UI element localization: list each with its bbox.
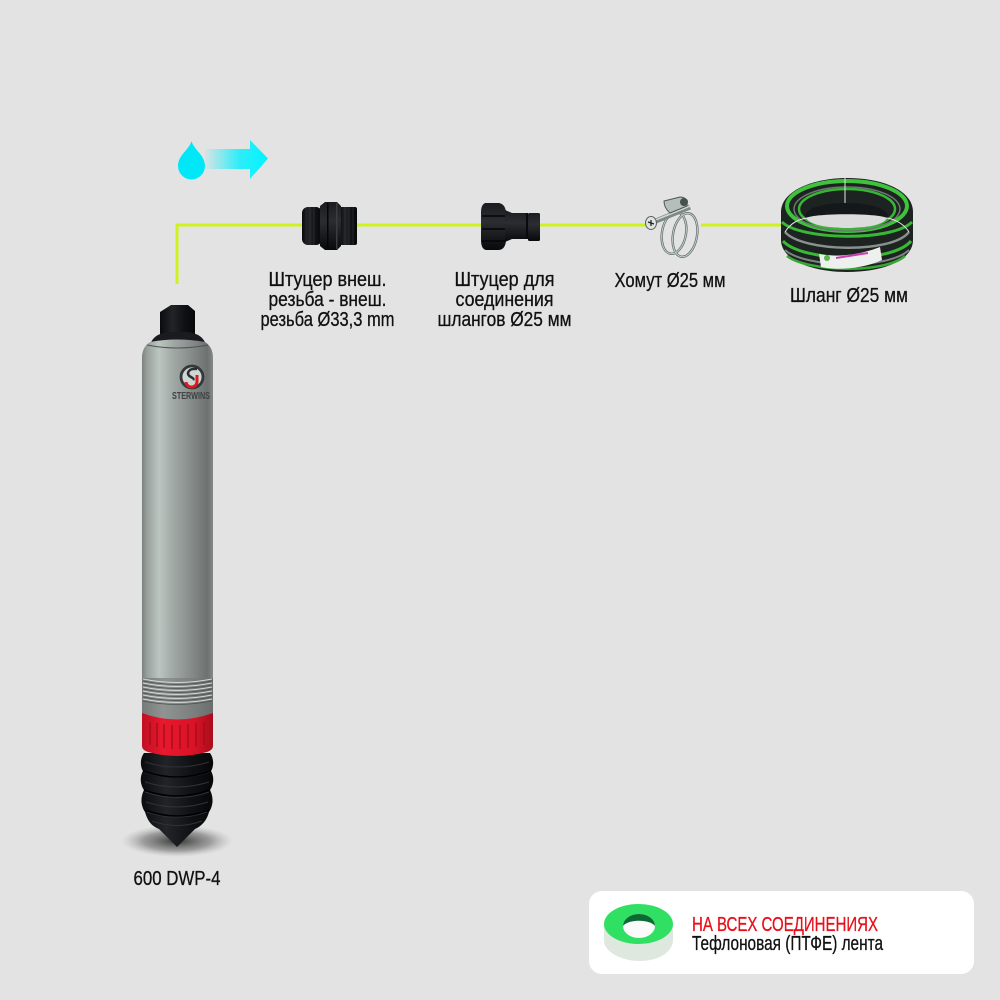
label: clamp: Хомут Ø25 мм bbox=[614, 270, 726, 292]
icon: teflon tape roll bbox=[604, 904, 673, 961]
pump bbox=[141, 305, 213, 847]
label: fitting 2: Штуцер для bbox=[454, 269, 554, 291]
icon: hose coil bbox=[781, 178, 913, 272]
icon: water drop with flow arrow bbox=[178, 140, 268, 180]
pump steel body bbox=[142, 340, 213, 679]
pump logo: STERWINS bbox=[172, 391, 210, 402]
label: fitting 2: соединения bbox=[456, 289, 554, 311]
fitting: male-male thread adapter bbox=[302, 202, 357, 250]
pump shadow bbox=[121, 825, 233, 857]
fitting: hose barb connector bbox=[481, 203, 540, 250]
pump red ring bbox=[142, 713, 213, 756]
icon: hose clamp bbox=[646, 197, 701, 259]
label: fitting 1: резьба - внеш. bbox=[268, 289, 386, 311]
pump threaded collar bbox=[142, 678, 213, 724]
pump nut bbox=[160, 305, 195, 338]
label: fitting 1 bbox=[260, 269, 394, 331]
text: teflon note: Тефлоновая (ПТФЕ) лента bbox=[692, 933, 884, 955]
label: fitting 1: Штуцер внеш. bbox=[268, 269, 386, 291]
panel: teflon tape note bbox=[589, 891, 974, 974]
text: teflon note: НА ВСЕХ СОЕДИНЕНИЯХ bbox=[692, 914, 878, 936]
label: fitting 2 bbox=[438, 269, 572, 331]
label: pump model: 600 DWP-4 bbox=[134, 868, 220, 890]
label: fitting 1: резьба Ø33,3 mm bbox=[260, 309, 394, 331]
pump logo bbox=[172, 366, 210, 402]
pump black strainer bbox=[141, 753, 213, 847]
label: fitting 2: шлангов Ø25 мм bbox=[438, 309, 572, 331]
connection line bbox=[177, 225, 782, 284]
label: hose: Шланг Ø25 мм bbox=[790, 285, 908, 307]
text: teflon note bbox=[692, 914, 884, 955]
